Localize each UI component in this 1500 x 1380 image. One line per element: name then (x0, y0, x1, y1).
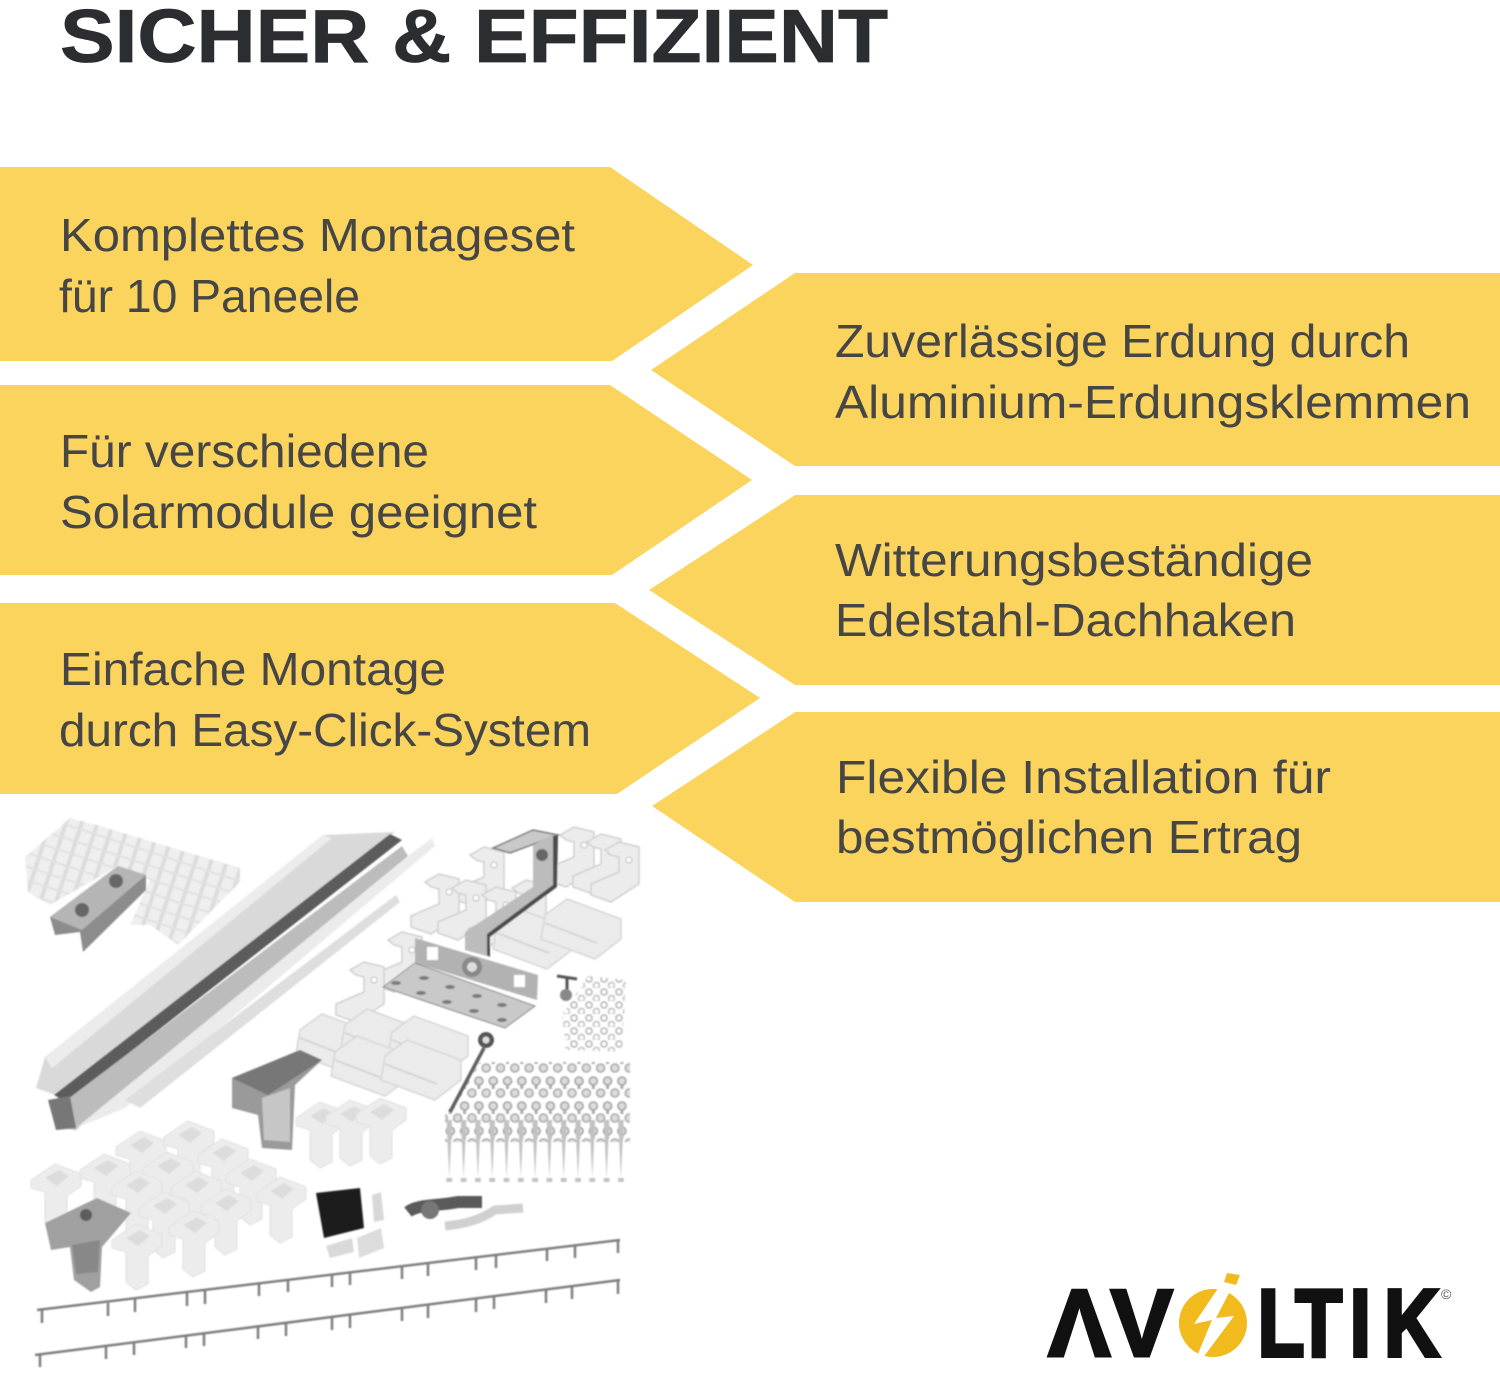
arrow panel: Witterungsbeständige Dachhaken (649, 495, 1500, 685)
ghost end clamps (31, 1121, 306, 1290)
logo letters left: ΛV (1048, 1270, 1173, 1377)
logo: Avoltik (1048, 1270, 1452, 1378)
arrow panel: Komplettes Montageset (0, 167, 753, 361)
arrow panel: Zuverlässige Erdung: Aluminium-Erdungsklemmen (835, 376, 1471, 428)
arrow panel: Witterungsbeständige Dachhaken: Edelstahl-Dachhaken (835, 594, 1296, 646)
arrow panel: Für verschiedene Solarmodule: Solarmodule geeignet (60, 486, 537, 538)
arrow panel: Flexible Installation: Flexible Installation für (836, 751, 1331, 803)
product illustration: mounting kit (25, 818, 639, 1367)
arrow panel: Komplettes Montageset: Komplettes Montageset (60, 209, 575, 261)
arrow panel: Für verschiedene Solarmodule (0, 385, 752, 575)
featured roof hook and angle plate (383, 830, 558, 1028)
arrow panel: Einfache Montage: Einfache Montage (60, 643, 446, 695)
arrow panel: Einfache Montage: durch Easy-Click-System (59, 704, 591, 756)
small nuts (557, 976, 626, 1052)
junction box and connectors (316, 1188, 523, 1258)
icon: lightning bolt circle (1179, 1272, 1247, 1378)
arrow panel: Für verschiedene Solarmodule: Für verschiedene (60, 425, 429, 477)
arrow panel: Einfache Montage (0, 603, 760, 794)
connector group top left (25, 818, 240, 952)
ghost roof hooks (296, 827, 639, 1100)
arrow panel: Komplettes Montageset: für 10 Paneele (59, 270, 360, 322)
rails (36, 832, 435, 1130)
arrow panel: Flexible Installation (652, 712, 1500, 902)
screws (445, 1032, 631, 1182)
arrow panel: Flexible Installation: bestmöglichen Ertrag (836, 811, 1302, 863)
arrow panel: Zuverlässige Erdung (651, 273, 1500, 466)
logo letters right: LTIK (1258, 1270, 1439, 1377)
grounding wires (35, 1240, 620, 1367)
copyright mark: © (1441, 1286, 1452, 1302)
middle clamps (232, 1050, 406, 1168)
arrow panel: Zuverlässige Erdung: Zuverlässige Erdung durch (835, 315, 1410, 367)
featured end clamp (45, 1198, 131, 1292)
arrow panel: Witterungsbeständige Dachhaken: Witterungsbeständige (835, 534, 1313, 586)
